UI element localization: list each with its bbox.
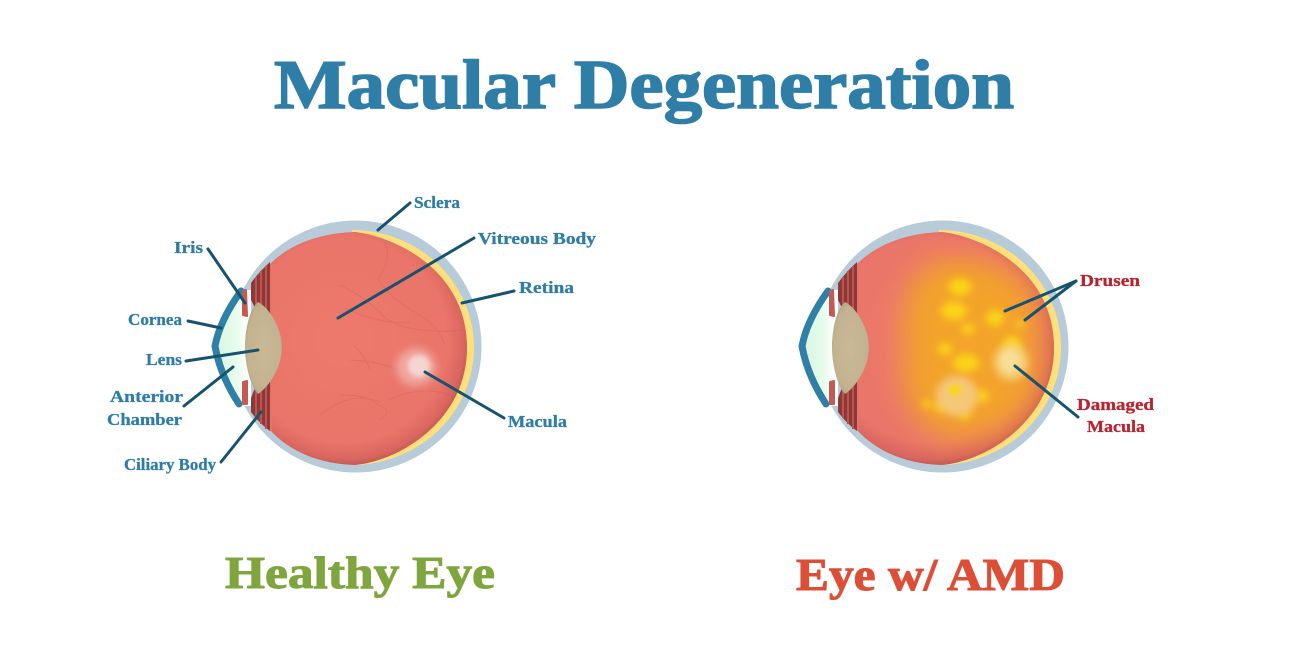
AMD eye diagram — [802, 220, 1068, 472]
label: Vitreous Body: Vitreous Body — [478, 229, 597, 248]
label: Lens: Lens — [146, 350, 183, 369]
drusen haze — [903, 259, 1041, 439]
caption: Healthy Eye: Healthy Eye — [225, 547, 495, 598]
label: Iris: Iris — [174, 238, 204, 257]
title: Macular Degeneration — [274, 47, 1014, 124]
eye anatomy base — [215, 220, 482, 472]
eye anatomy base — [802, 220, 1068, 472]
caption: Eye w/ AMD: Eye w/ AMD — [796, 549, 1065, 600]
macula — [396, 348, 436, 386]
label: Damaged: Damaged — [1077, 395, 1154, 414]
label: Anterior: Anterior — [110, 387, 183, 406]
label: Macula: Macula — [508, 412, 567, 431]
label: Sclera: Sclera — [414, 193, 460, 212]
label: Cornea: Cornea — [128, 310, 182, 329]
damaged macula — [936, 344, 1028, 416]
label: Drusen: Drusen — [1080, 271, 1140, 290]
label: Macula (damaged): Macula — [1087, 417, 1145, 436]
AMD eye leader lines — [1005, 281, 1078, 417]
healthy eye diagram — [215, 220, 482, 472]
label: Ciliary Body: Ciliary Body — [124, 455, 217, 474]
retinal vessels — [320, 240, 465, 420]
label: Retina: Retina — [519, 278, 574, 297]
healthy eye leader lines — [184, 203, 514, 462]
label: Chamber: Chamber — [107, 410, 182, 429]
drusen spots — [922, 278, 1024, 419]
